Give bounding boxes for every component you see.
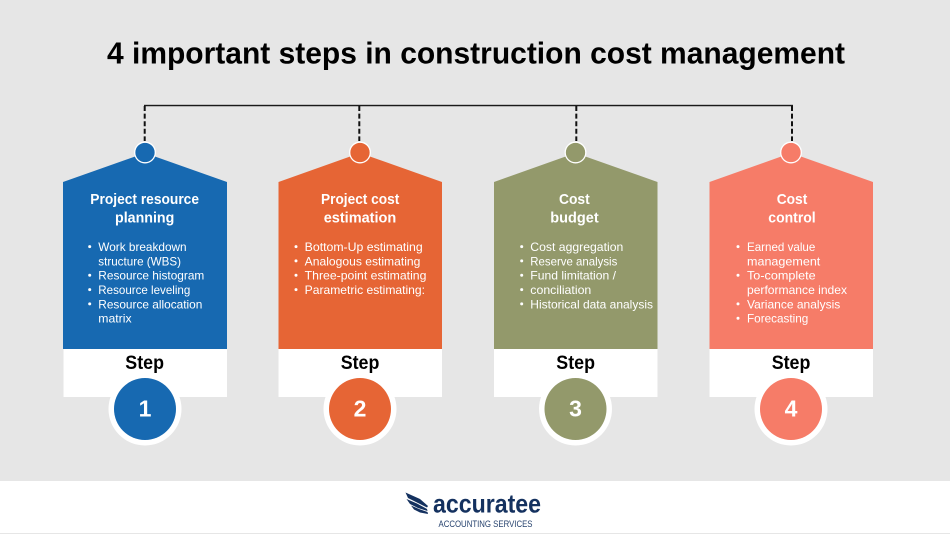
- bullet list 1: structure (WBS): [98, 254, 181, 268]
- card heading 4: [768, 191, 816, 226]
- step label 4: Step: [772, 353, 810, 374]
- white step tab 2: [278, 349, 442, 397]
- logo: accuratee accounting services: [406, 488, 541, 530]
- card body 2: [278, 153, 442, 349]
- card body 1: [63, 153, 227, 349]
- bullet list 2: Parametric estimating:: [305, 283, 425, 297]
- card heading 4: Cost: [777, 191, 807, 208]
- bullet list 3: Fund limitation /: [530, 269, 617, 283]
- card heading 3: Cost: [559, 191, 590, 208]
- number badge 4: [754, 372, 828, 446]
- bullet list 2: [294, 240, 426, 297]
- number badge 2: [324, 372, 396, 446]
- number badge 4: 4: [785, 396, 798, 422]
- bullet list 4: [736, 240, 847, 326]
- number badge 2: 2: [354, 396, 366, 422]
- number badge 3: 3: [569, 396, 582, 422]
- white step tab 4: [710, 349, 873, 397]
- bullet list 1: Resource histogram: [98, 269, 204, 283]
- panel: step 2 project cost estimation: [278, 142, 442, 445]
- connector dot 3: [565, 142, 586, 163]
- card body 3: [494, 153, 658, 349]
- card heading 1: [90, 191, 199, 226]
- bullet list 1: Work breakdown: [98, 240, 187, 254]
- logo tagline: ACCOUNTING SERVICES: [438, 519, 532, 530]
- card heading 1: planning: [115, 209, 174, 226]
- bullet list 4: Forecasting: [747, 312, 808, 326]
- bullet list 2: Three-point estimating: [305, 269, 426, 283]
- white step tab 1: [64, 349, 227, 397]
- bullet list 1: Resource allocation: [98, 297, 202, 311]
- step label 1: Step: [125, 353, 164, 374]
- number badge 1: 1: [139, 396, 152, 422]
- bullet list 2: Analogous estimating: [305, 254, 420, 268]
- connector dot 1: [135, 142, 155, 163]
- number badge 1: [108, 372, 182, 446]
- bullet list 2: Bottom-Up estimating: [305, 240, 423, 254]
- bullet list 4: performance index: [747, 283, 847, 297]
- bullet list 4: Variance analysis: [747, 297, 840, 311]
- step label 3: Step: [556, 353, 595, 374]
- title: 4 important steps in construction cost management: [107, 36, 845, 70]
- icon: logo wing: [406, 492, 428, 514]
- bullet list 1: [88, 240, 204, 326]
- card heading 2: [321, 191, 399, 226]
- connector lines: [144, 104, 793, 141]
- panel: step 1 project resource planning: [63, 142, 227, 445]
- bullet list 3: Cost aggregation: [530, 240, 623, 254]
- bullet list 1: Resource leveling: [98, 283, 190, 297]
- bullet list 3: Reserve analysis: [530, 254, 617, 268]
- card body 4: [710, 153, 873, 349]
- connector dot 2: [350, 142, 370, 163]
- bullet list 4: Earned value: [747, 240, 816, 254]
- bullet list 4: management: [747, 254, 821, 268]
- card heading 3: budget: [550, 209, 599, 226]
- number badge 3: [539, 372, 612, 446]
- bullet list 3: [520, 240, 653, 311]
- bullet list 1: matrix: [98, 312, 132, 326]
- bullet list 3: conciliation: [530, 283, 591, 297]
- panel: step 4 cost control: [710, 142, 873, 445]
- card heading 4: control: [768, 209, 816, 226]
- card heading 1: Project resource: [90, 191, 199, 208]
- card heading 3: [550, 191, 599, 226]
- card heading 2: Project cost: [321, 191, 399, 208]
- panel: step 3 cost budget: [494, 142, 658, 445]
- logo wordmark: accuratee: [433, 488, 541, 518]
- bullet list 4: To-complete: [747, 269, 816, 283]
- footer band: [0, 481, 950, 533]
- step label 2: Step: [341, 353, 379, 374]
- card heading 2: estimation: [324, 209, 396, 226]
- connector dot 4: [781, 142, 801, 163]
- bullet list 3: Historical data analysis: [530, 297, 653, 311]
- white step tab 3: [494, 349, 658, 397]
